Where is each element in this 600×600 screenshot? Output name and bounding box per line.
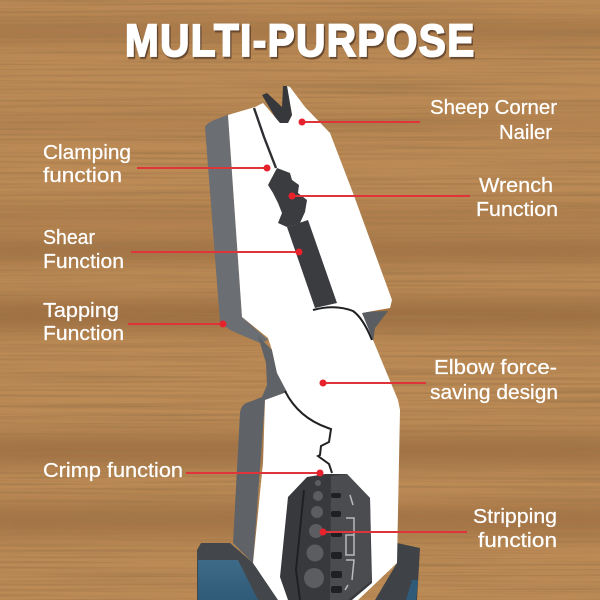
label: Elbow force-saving design: Elbow force- [434,357,557,379]
label: Clamping function: function [43,165,122,187]
grey side of upper jaw [205,115,268,343]
label: Clamping function [43,142,270,187]
label: Elbow force-saving design [320,357,558,404]
V notch: sheep corner nailer [262,86,292,123]
blue left grip [197,543,282,600]
label: Stripping function [320,506,557,552]
shear blades [287,220,337,308]
label: Crimp function [43,460,324,482]
label: Shear Function [43,227,302,273]
label: Stripping function: function [478,530,557,552]
die holes [304,480,324,588]
label: Wrench Function [288,175,558,221]
crimping die [280,474,372,600]
label: Clamping function: Clamping [43,142,131,164]
label: Sheep Corner Nailer: Sheep Corner [430,97,557,119]
grey side of lower handle [233,336,287,563]
elbow pivot gap [313,307,372,340]
label: Wrench Function: Wrench [479,175,553,197]
label: Elbow force-saving design: saving design [430,382,558,404]
label: Sheep Corner Nailer: Nailer [499,122,552,144]
label: Stripping function: Stripping [473,506,557,528]
wrench jaws [268,168,307,227]
label: Tapping Function: Function [43,323,124,345]
label: Sheep Corner Nailer [298,97,557,144]
label: Wrench Function: Function [476,199,558,221]
label: Tapping Function [43,300,226,345]
label: Crimp function: Crimp function [43,460,183,482]
label: Shear Function: Shear [43,227,95,249]
pliers illustration [197,86,420,600]
jaw slit [254,108,276,168]
label: Shear Function: Function [43,251,124,273]
joint crack line [285,391,332,473]
die engraving [345,495,354,590]
die teeth [331,493,342,593]
label: Tapping Function: Tapping [43,300,119,322]
right grip [375,543,420,600]
title: MULTI-PURPOSE [125,16,474,67]
white plier body [228,86,400,600]
grey shadow under upper jaw [360,311,388,342]
